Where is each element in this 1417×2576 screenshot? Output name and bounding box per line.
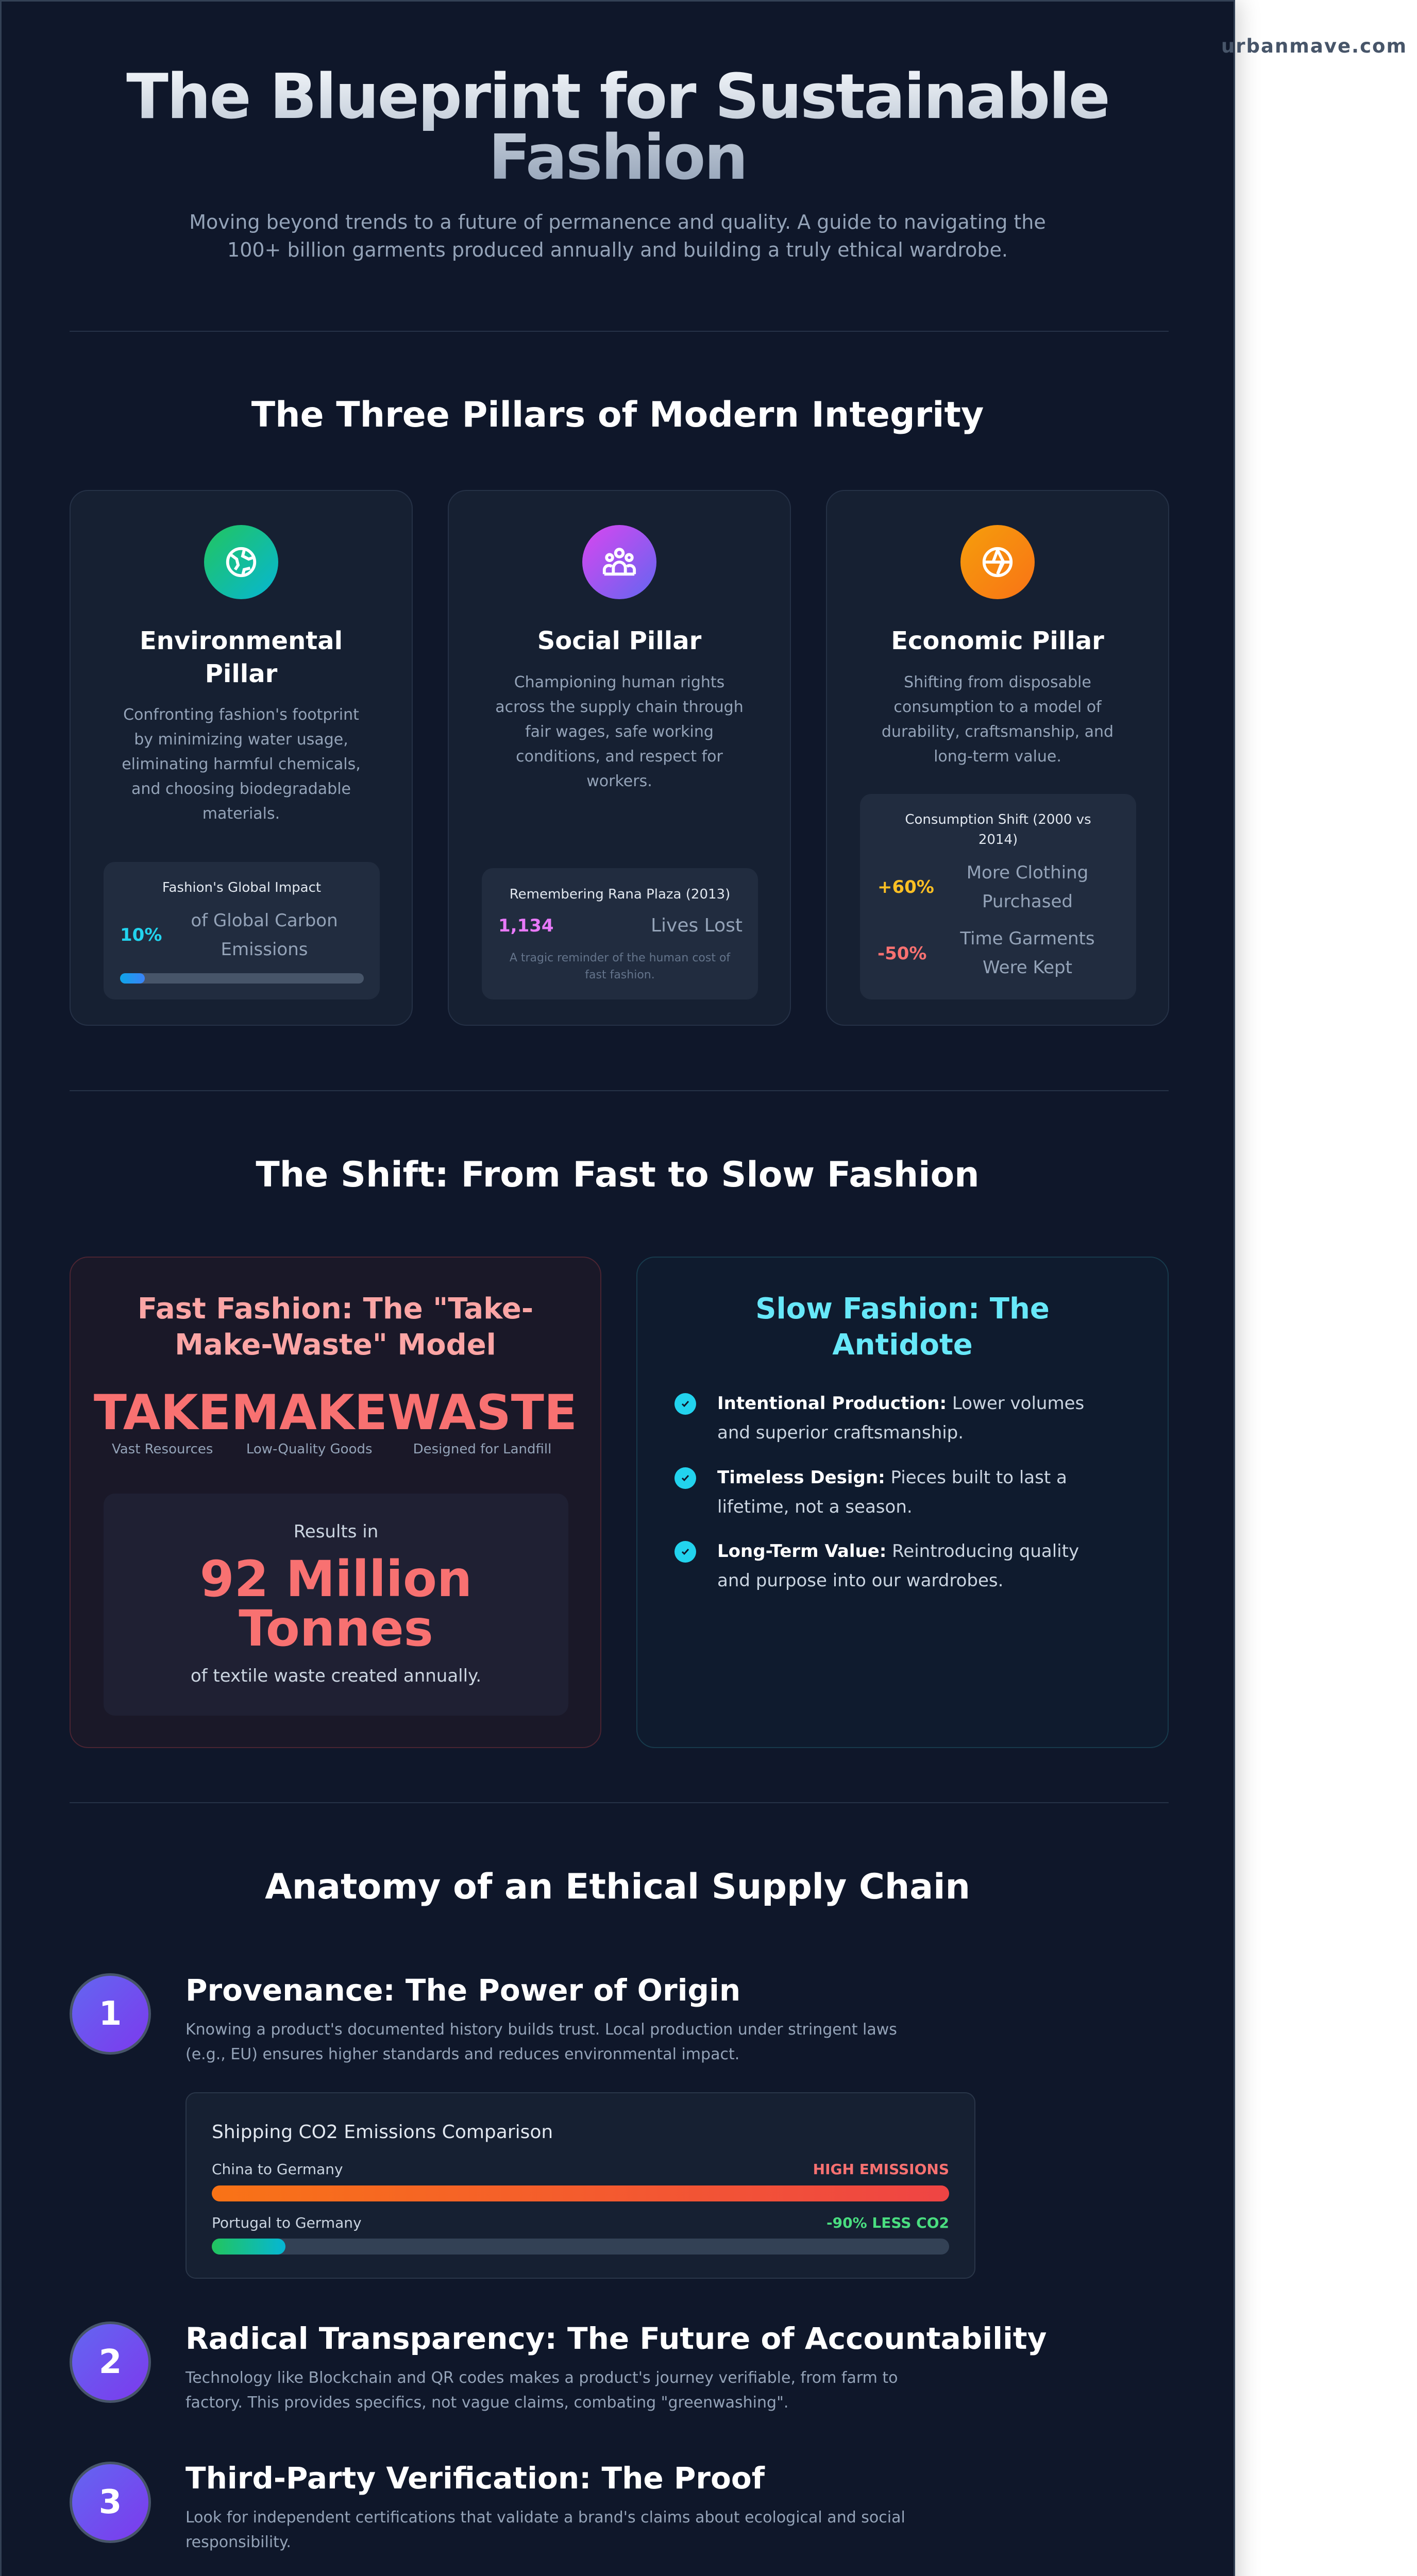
title (2, 67, 1234, 189)
description: workers. (586, 772, 652, 790)
heading: the shift: The Shift: From Fast to Slow Fashion (256, 1155, 980, 1195)
subtitle: 100+ billion garments produced annually and building a truly ethical wardrobe. (227, 239, 1008, 261)
description (495, 673, 744, 790)
chart: shipping emissions: China to Germany (212, 2161, 343, 2178)
description: fair wages, safe working (525, 723, 714, 741)
title: Fashion (488, 122, 747, 194)
progress bar (120, 973, 364, 984)
step 3 number: 3 (99, 2483, 122, 2521)
subtitle: Moving beyond trends to a future of permanence and quality. A guide to navigating the (189, 211, 1046, 233)
panel: economic pillar (826, 490, 1169, 1026)
stat box: carbon: Emissions (221, 939, 308, 960)
heading: Economic Pillar (891, 626, 1104, 655)
list item 1: Intentional Production: Lower volumes (717, 1393, 1084, 1414)
icon: globe (204, 525, 278, 599)
description: Shifting from disposable (904, 673, 1091, 691)
list item 2 (674, 1467, 1067, 1517)
stat box: rana plaza: A tragic reminder of the human cost of (510, 952, 730, 964)
step 2 number: 2 (99, 2343, 122, 2381)
list item 3 (674, 1541, 1079, 1591)
description: durability, craftsmanship, and (882, 723, 1114, 741)
watermark: urbanmave.com (1221, 35, 1407, 57)
panel: slow fashion (636, 1257, 1169, 1748)
stat box: carbon: Fashion's Global Impact (162, 880, 321, 895)
take make waste: Vast Resources (112, 1442, 213, 1457)
description: conditions, and respect for (516, 748, 723, 766)
heading: Antidote (832, 1328, 973, 1362)
stat box: carbon: 10% (120, 925, 162, 945)
description: across the supply chain through (495, 698, 744, 716)
callout: 92 million tonnes: Results in (294, 1521, 378, 1542)
stat box: consumption: More Clothing (967, 862, 1088, 883)
stat box: consumption (860, 794, 1136, 999)
step 3 number (70, 2462, 151, 2543)
take make waste: TAKE (94, 1385, 231, 1441)
stat box: carbon (104, 862, 380, 999)
step 3 title: Third-Party Verification: The Proof (185, 2461, 765, 2496)
callout: 92 million tonnes: Tonnes (239, 1600, 433, 1657)
step 1 text (185, 2021, 897, 2063)
list item 1 (674, 1393, 1084, 1443)
take make waste: WASTE (387, 1385, 577, 1441)
step 2 title: Radical Transparency: The Future of Accountability (185, 2321, 1047, 2356)
chart: shipping emissions: -90% LESS CO2 (826, 2214, 949, 2231)
step 3 text (185, 2509, 905, 2551)
chart: shipping emissions: HIGH EMISSIONS (813, 2161, 949, 2178)
stat box: rana plaza: fast fashion. (585, 969, 655, 981)
description: Confronting fashion's footprint (123, 706, 359, 724)
stat box: rana plaza (482, 868, 758, 999)
description: long-term value. (934, 748, 1061, 766)
description (882, 673, 1114, 766)
heading: Make-Waste" Model (175, 1328, 496, 1362)
stat box: consumption: 2014) (979, 832, 1018, 848)
take make waste: MAKE (231, 1385, 387, 1441)
step 2 number (70, 2321, 151, 2403)
description: materials. (203, 805, 280, 823)
description (122, 706, 361, 823)
heading: supply chain: Anatomy of an Ethical Supply Chain (265, 1867, 970, 1907)
icon: globe (960, 525, 1035, 599)
chart: shipping emissions: Shipping CO2 Emissions Comparison (212, 2122, 553, 2143)
chart: shipping emissions (185, 2092, 975, 2279)
step 1 number (70, 1973, 151, 2055)
description: by minimizing water usage, (134, 731, 348, 749)
heading (138, 1292, 533, 1362)
chart: shipping emissions: Portugal to Germany (212, 2214, 362, 2231)
description: Championing human rights (514, 673, 724, 691)
list item 1: and superior craftsmanship. (717, 1422, 964, 1443)
heading: three pillars: The Three Pillars of Modern Integrity (251, 395, 984, 435)
callout: 92 million tonnes: of textile waste created annually. (191, 1666, 481, 1686)
step 1 title: Provenance: The Power of Origin (185, 1973, 740, 2008)
step 2 text: factory. This provides specifics, not vague claims, combating "greenwashing". (185, 2394, 788, 2412)
panel: environmental pillar (70, 490, 413, 1026)
heading (140, 626, 343, 688)
step 1 number: 1 (99, 1995, 122, 2033)
icon: people (582, 525, 656, 599)
panel: social pillar (448, 490, 791, 1026)
list item 3: Long-Term Value: Reintroducing quality (717, 1541, 1079, 1562)
list item 2: Timeless Design: Pieces built to last a (717, 1467, 1067, 1488)
description: and choosing biodegradable (131, 780, 351, 798)
take make waste: Low-Quality Goods (246, 1442, 373, 1457)
heading: Environmental (140, 626, 343, 655)
step 3 text: responsibility. (185, 2533, 291, 2551)
step 2 text (185, 2369, 898, 2412)
list item 2: lifetime, not a season. (717, 1497, 913, 1517)
step 3 text: Look for independent certifications that validate a brand's claims about ecological and social (185, 2509, 905, 2527)
description: eliminating harmful chemicals, (122, 755, 361, 773)
stat box: consumption: +60% (878, 877, 934, 897)
description: consumption to a model of (893, 698, 1102, 716)
stat box: consumption: Time Garments (960, 928, 1095, 949)
take make waste: Designed for Landfill (413, 1442, 551, 1457)
stat box: consumption: -50% (878, 943, 926, 964)
take make waste (94, 1385, 577, 1457)
stat box: rana plaza: Remembering Rana Plaza (2013) (510, 887, 730, 902)
callout: 92 million tonnes (104, 1494, 568, 1716)
stat box: consumption: Were Kept (983, 957, 1072, 978)
heading: Pillar (205, 659, 277, 688)
stat box: consumption: Consumption Shift (2000 vs (905, 812, 1091, 827)
heading: Fast Fashion: The "Take- (138, 1292, 533, 1326)
panel: fast fashion (70, 1257, 601, 1748)
list item 3: and purpose into our wardrobes. (717, 1570, 1003, 1591)
stat box: rana plaza: 1,134 (498, 916, 554, 936)
title: The Blueprint for Sustainable (126, 61, 1109, 133)
stat box: consumption: Purchased (982, 891, 1073, 912)
callout: 92 million tonnes: 92 Million (200, 1550, 472, 1608)
stat box: rana plaza: Lives Lost (651, 915, 743, 936)
step 1 text: (e.g., EU) ensures higher standards and reduces environmental impact. (185, 2045, 739, 2063)
heading: Slow Fashion: The (755, 1292, 1050, 1326)
subtitle (189, 211, 1046, 261)
stat box: carbon: of Global Carbon (191, 910, 338, 931)
step 1 text: Knowing a product's documented history builds trust. Local production under stringent laws (185, 2021, 897, 2039)
heading (755, 1292, 1050, 1362)
heading: Social Pillar (537, 626, 701, 655)
step 2 text: Technology like Blockchain and QR codes makes a product's journey verifiable, from farm to (185, 2369, 898, 2387)
